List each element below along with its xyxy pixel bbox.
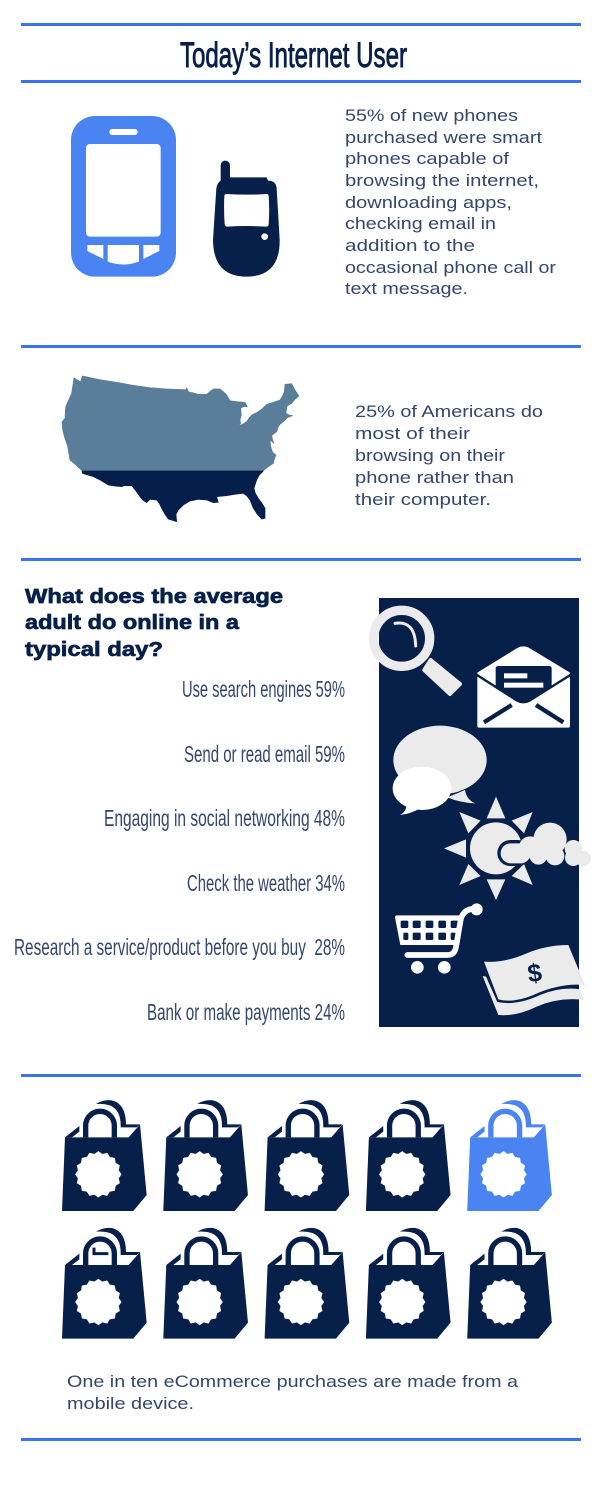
icon: bag 6 — [62, 1228, 147, 1339]
icon: feature phone — [213, 161, 280, 277]
map: United States, bottom quarter highlighted — [62, 376, 299, 522]
text: smartphone statistic: phones capable of — [345, 149, 509, 168]
text: browsing statistic: most of their — [355, 424, 470, 443]
icon: bag 5 highlighted — [467, 1100, 552, 1211]
text: smartphone statistic: purchased were smart — [345, 128, 542, 147]
text: smartphone statistic: checking email in — [345, 214, 496, 233]
text: browsing statistic — [355, 402, 543, 509]
heading: what adults do online: typical day? — [25, 639, 163, 661]
text: smartphone statistic: browsing the internet, — [345, 171, 539, 190]
text: eCommerce statistic: One in ten eCommerce purchases are made from a — [67, 1372, 519, 1391]
list: daily online activities: Engaging in social networking 48% — [104, 805, 345, 831]
text: eCommerce statistic — [67, 1372, 519, 1413]
heading: what adults do online: What does the average — [25, 586, 283, 608]
icon: money — [483, 945, 585, 1015]
icon: bag 1 — [62, 1100, 147, 1211]
icon: speech bubbles — [393, 726, 487, 815]
icon: smartphone — [71, 116, 176, 277]
chart: ten shopping bags, one highlighted — [62, 1100, 552, 1339]
list: daily online activities — [14, 676, 345, 1025]
text: smartphone statistic: addition to the — [345, 236, 475, 255]
list: daily online activities: Bank or make payments 24% — [147, 999, 345, 1025]
icon: bag 9 — [366, 1228, 451, 1339]
list: daily online activities: Use search engines 59% — [182, 676, 345, 702]
text: eCommerce statistic: mobile device. — [67, 1394, 194, 1413]
title: Today’s Internet User — [180, 36, 407, 75]
icon: magnifying glass — [374, 610, 460, 694]
icon: money: $ — [526, 959, 544, 989]
icon: bag 10 — [467, 1228, 552, 1339]
text: browsing statistic: 25% of Americans do — [355, 402, 543, 421]
text: smartphone statistic: text message. — [345, 279, 468, 298]
text: browsing statistic: their computer. — [355, 490, 491, 509]
list: daily online activities: Check the weather 34% — [187, 870, 345, 896]
text: smartphone statistic: downloading apps, — [345, 193, 512, 212]
text: smartphone statistic — [345, 106, 556, 298]
icon: bag 4 — [366, 1100, 451, 1211]
icon: bag 8 — [265, 1228, 349, 1339]
text: browsing statistic: browsing on their — [355, 446, 505, 465]
icon: envelope — [476, 646, 571, 728]
panel: activity icons — [374, 598, 591, 1027]
icon: bag 2 — [163, 1100, 248, 1211]
heading: what adults do online — [25, 586, 283, 661]
list: daily online activities: Send or read email 59% — [184, 741, 345, 767]
text: smartphone statistic: 55% of new phones — [345, 106, 518, 125]
icon: shopping cart — [395, 903, 483, 974]
text: browsing statistic: phone rather than — [355, 468, 514, 487]
icon: bag 3 — [265, 1100, 349, 1211]
list: daily online activities: Research a service/product before you buy 28% — [14, 934, 345, 960]
icon: sun and cloud — [444, 797, 591, 900]
heading: what adults do online: adult do online in a — [25, 612, 240, 634]
icon: bag 7 — [163, 1228, 248, 1339]
text: smartphone statistic: occasional phone call or — [345, 258, 556, 277]
